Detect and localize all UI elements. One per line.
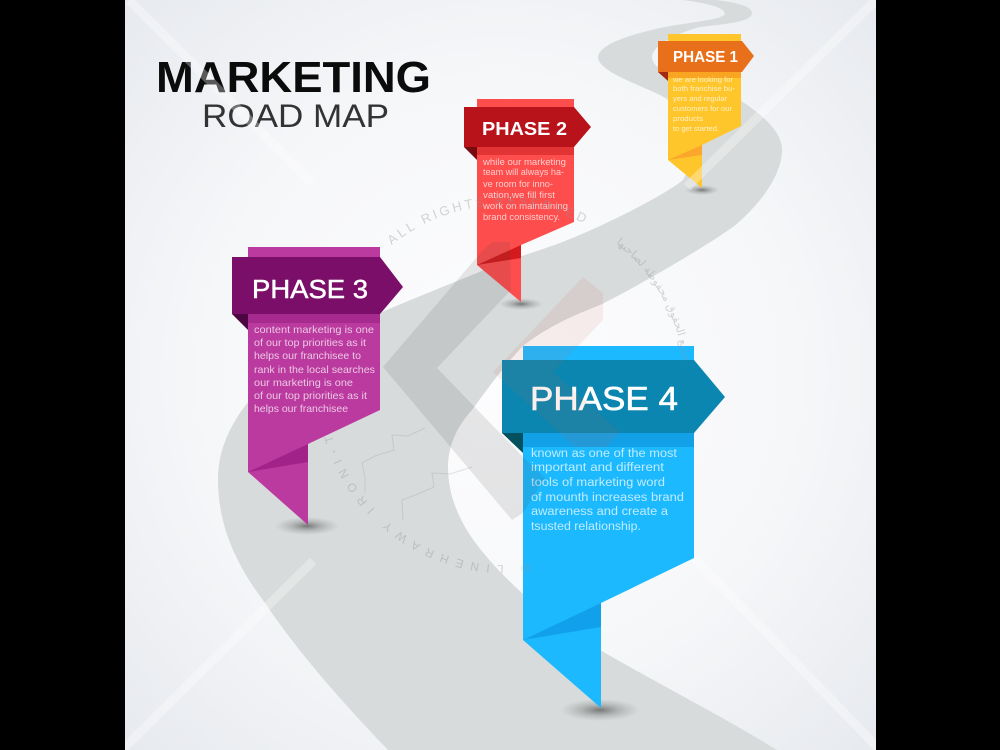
fold phase 3 [248, 444, 308, 472]
fold corner phase 1 [658, 72, 668, 81]
text phase 3: rank in the local searches [254, 364, 375, 376]
band phase 4 [523, 433, 694, 447]
heading phase 1: PHASE 1 [673, 49, 738, 66]
text phase 3: content marketing is one [254, 324, 374, 336]
shadow phase 3 [280, 518, 334, 534]
body phase 2 [477, 99, 574, 302]
body phase 3 [248, 247, 380, 525]
heading phase 3: PHASE 3 [252, 274, 368, 304]
fold corner phase 2 [464, 147, 477, 160]
text phase 1: products [673, 114, 703, 123]
header phase 1 [658, 41, 754, 72]
text phase 3: our marketing is one [254, 377, 353, 389]
text phase 2: while our marketing [482, 157, 566, 167]
ribbon: phase 4 [502, 346, 725, 721]
fold corner phase 3 [232, 314, 248, 330]
text phase 4: important and different [531, 462, 665, 474]
text phase 3: of our top priorities as it [254, 337, 366, 349]
background panel [125, 0, 876, 750]
shadow phase 1 [688, 186, 716, 194]
text phase 4: tools of marketing word [531, 477, 665, 489]
text phase 4: of mounth increases brand [531, 492, 684, 504]
text phase 2: work on maintaining [482, 201, 568, 211]
text phase 1: customers for our [673, 104, 733, 113]
watermark diagonal streaks [122, 0, 880, 750]
text phase 4: tsusted relationship. [531, 521, 641, 533]
text phase 1: to get started. [673, 124, 719, 133]
band phase 3 [248, 314, 380, 323]
text phase 2: ve room for inno- [483, 179, 553, 189]
fold phase 2 [477, 245, 521, 265]
text phase 4 [531, 448, 684, 533]
text phase 2: vation,we fill first [483, 190, 556, 200]
body phase 1 [668, 34, 741, 188]
text phase 3 [254, 324, 375, 415]
watermark circular text: جميع الحقوق محفوظة لصاحبها [618, 238, 688, 360]
watermark circular text: © LINEHRAWY IRONI-T [324, 437, 530, 574]
ribbon: phase 1 [658, 34, 754, 195]
winding road [218, 0, 782, 750]
text phase 1: we are looking for [672, 75, 734, 84]
watermark circular text [324, 196, 688, 574]
ribbon: phase 2 [464, 99, 591, 310]
title [156, 53, 431, 134]
header phase 2 [464, 107, 591, 147]
title line 2: ROAD MAP [202, 98, 389, 134]
text phase 4: known as one of the most [531, 448, 678, 460]
fold phase 1 [668, 145, 702, 160]
body phase 4 [523, 346, 694, 708]
heading phase 2: PHASE 2 [482, 119, 567, 139]
shadow phase 4 [566, 700, 634, 720]
header phase 4 [502, 360, 725, 433]
text phase 2: brand consistency. [483, 212, 560, 222]
text phase 2: team will always ha- [483, 167, 564, 177]
text phase 1 [672, 75, 736, 133]
shadow phase 2 [502, 299, 540, 309]
text phase 3: helps our franchisee [254, 403, 348, 415]
fold corner phase 4 [502, 433, 523, 453]
text phase 1: both franchise bu- [673, 84, 736, 93]
title line 1: MARKETING [156, 53, 431, 102]
band phase 1 [668, 72, 741, 78]
text phase 3: helps our franchisee to [254, 350, 361, 362]
text phase 1: yers and regular [673, 94, 727, 103]
header phase 3 [232, 257, 403, 314]
text phase 4: awareness and create a [531, 506, 669, 518]
band phase 2 [477, 147, 574, 155]
text phase 2 [482, 157, 568, 222]
fold phase 4 [523, 603, 601, 640]
watermark circular text: ALL RIGHTS RESERVED [389, 196, 586, 245]
text phase 3: of our top priorities as it [254, 390, 367, 402]
ribbon: phase 3 [232, 247, 403, 535]
watermark logo: pink chevron [493, 277, 620, 447]
watermark logo: grey chevron [383, 242, 545, 520]
heading phase 4: PHASE 4 [530, 380, 678, 417]
